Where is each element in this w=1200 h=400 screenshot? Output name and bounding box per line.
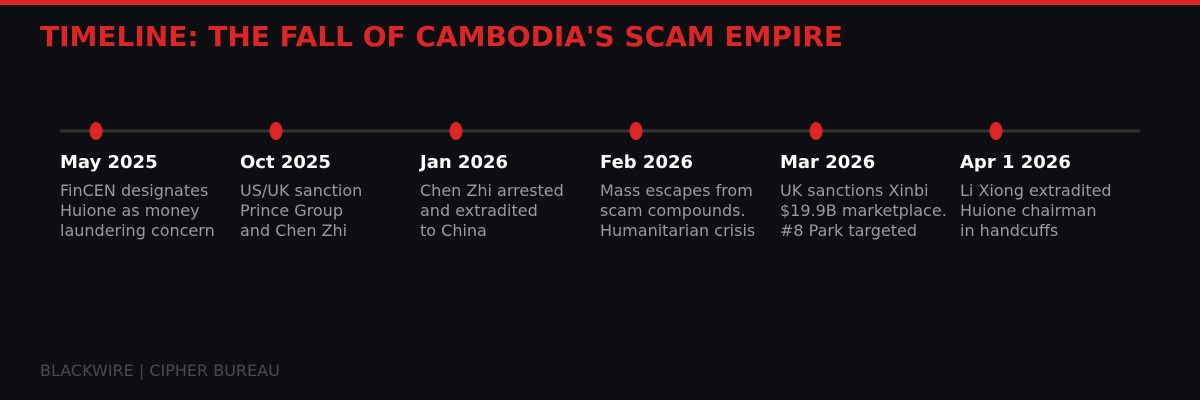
event: Apr 1 2026: Apr 1 2026 <box>960 152 1071 173</box>
event: May 2025: Huione as money <box>60 201 200 220</box>
footer credit: BLACKWIRE | CIPHER BUREAU <box>40 361 280 380</box>
event: Oct 2025: Prince Group <box>240 201 343 220</box>
event: Apr 1 2026: Huione chairman <box>960 201 1096 220</box>
event: Oct 2025: and Chen Zhi <box>240 221 347 240</box>
event: Jan 2026: Jan 2026 <box>418 152 508 173</box>
event: Jan 2026: Chen Zhi arrested <box>420 181 564 200</box>
event: Feb 2026: Humanitarian crisis <box>600 221 755 240</box>
event: Jan 2026: to China <box>420 221 487 240</box>
event: Oct 2025 <box>240 122 362 240</box>
event: May 2025: FinCEN designates <box>60 181 208 200</box>
event: Apr 1 2026 <box>960 122 1112 240</box>
event: Mar 2026 <box>780 122 947 240</box>
title: TIMELINE: THE FALL OF CAMBODIA'S SCAM EMPIRE <box>40 20 843 53</box>
event: May 2025: laundering concern <box>60 221 215 240</box>
timeline axis <box>60 130 1140 132</box>
event: Apr 1 2026: in handcuffs <box>960 221 1058 240</box>
event: May 2025: May 2025 <box>60 152 158 173</box>
event: Jan 2026 <box>418 122 564 240</box>
event: Feb 2026: Feb 2026 <box>600 152 693 173</box>
event: May 2025 <box>60 122 215 240</box>
event: Mar 2026: UK sanctions Xinbi <box>780 181 929 200</box>
event: Mar 2026: $19.9B marketplace. <box>780 201 947 220</box>
event: Feb 2026 <box>600 122 755 240</box>
event: Oct 2025: US/UK sanction <box>240 181 362 200</box>
event: Oct 2025: Oct 2025 <box>240 152 331 173</box>
event: Jan 2026: and extradited <box>420 201 538 220</box>
event: Apr 1 2026: Li Xiong extradited <box>960 181 1112 200</box>
event: Feb 2026: Mass escapes from <box>600 181 753 200</box>
event: Mar 2026: Mar 2026 <box>780 152 875 173</box>
event: Mar 2026: #8 Park targeted <box>780 221 917 240</box>
event: Feb 2026: scam compounds. <box>600 201 746 220</box>
